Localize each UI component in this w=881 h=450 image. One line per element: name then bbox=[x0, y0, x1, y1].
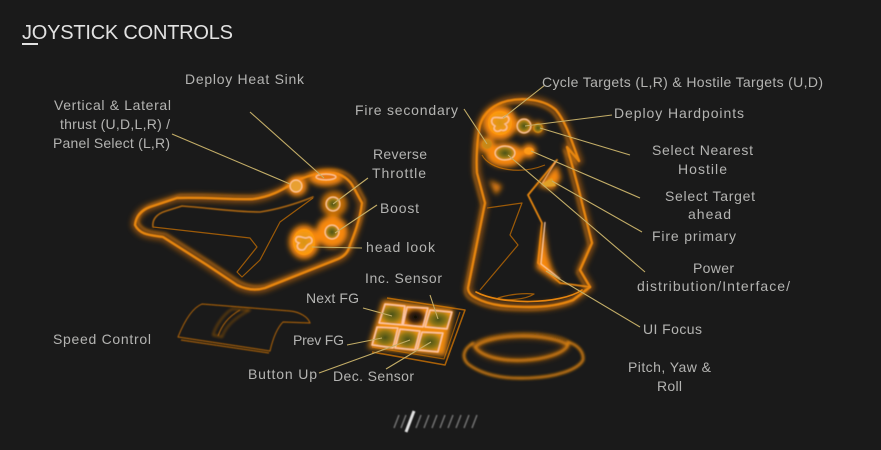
label: Speed Control: Speed Control bbox=[53, 331, 151, 347]
label: Fire primary: Fire primary bbox=[652, 228, 736, 244]
label: Deploy Hardpoints: Deploy Hardpoints bbox=[614, 105, 744, 121]
icon: button panel bbox=[368, 298, 465, 365]
label: Reverse Throttle bbox=[372, 146, 427, 181]
label: Select Nearest Hostile: Select Nearest bbox=[652, 142, 753, 158]
leader lines bbox=[172, 85, 645, 373]
label: Select Nearest Hostile: Hostile bbox=[678, 161, 727, 177]
label: UI Focus: UI Focus bbox=[643, 321, 702, 337]
label: thrust and panel select: Panel Select (L,R) bbox=[53, 135, 170, 151]
label: Prev FG: Prev FG bbox=[293, 332, 344, 348]
icon: speed control slider bbox=[178, 304, 310, 353]
label: Dec. Sensor: Dec. Sensor bbox=[333, 368, 414, 384]
title: JOYSTICK CONTROLS bbox=[22, 22, 233, 44]
label: Reverse Throttle: Throttle bbox=[372, 165, 426, 181]
label: Select Nearest Hostile bbox=[652, 142, 753, 177]
label: thrust and panel select: thrust (U,D,L,R) / bbox=[60, 116, 170, 132]
label: Fire secondary: Fire secondary bbox=[355, 102, 458, 118]
label: Select Target ahead: Select Target bbox=[665, 188, 755, 204]
label: Boost: Boost bbox=[380, 200, 419, 216]
icon: throttle joystick bbox=[135, 170, 365, 289]
label: Power distribution bbox=[637, 260, 790, 294]
label: thrust and panel select: Vertical & Lateral bbox=[54, 97, 171, 113]
label: Power distribution: distribution/Interface/ bbox=[637, 278, 790, 294]
icon: pedal ring bbox=[464, 333, 583, 378]
label: Reverse Throttle: Reverse bbox=[373, 146, 427, 162]
label: Pitch, Yaw and Roll bbox=[628, 359, 712, 394]
label: thrust and panel select bbox=[53, 97, 171, 151]
page indicator bbox=[394, 411, 477, 432]
label: Next FG: Next FG bbox=[306, 290, 359, 306]
label: Pitch, Yaw and Roll: Pitch, Yaw & bbox=[628, 359, 712, 375]
icon: flight stick bbox=[465, 99, 592, 310]
label: Pitch, Yaw and Roll: Roll bbox=[657, 378, 682, 394]
label: Deploy Heat Sink: Deploy Heat Sink bbox=[185, 71, 305, 87]
label: head look: head look bbox=[366, 239, 436, 255]
label: Select Target ahead: ahead bbox=[688, 206, 731, 222]
label: Button Up: Button Up bbox=[248, 366, 317, 382]
label: Cycle Targets: Cycle Targets (L,R) & Hostile Targets (U,D) bbox=[542, 74, 823, 90]
label: Select Target ahead bbox=[665, 188, 755, 222]
label: Power distribution: Power bbox=[693, 260, 734, 276]
label: Inc. Sensor: Inc. Sensor bbox=[365, 270, 442, 286]
